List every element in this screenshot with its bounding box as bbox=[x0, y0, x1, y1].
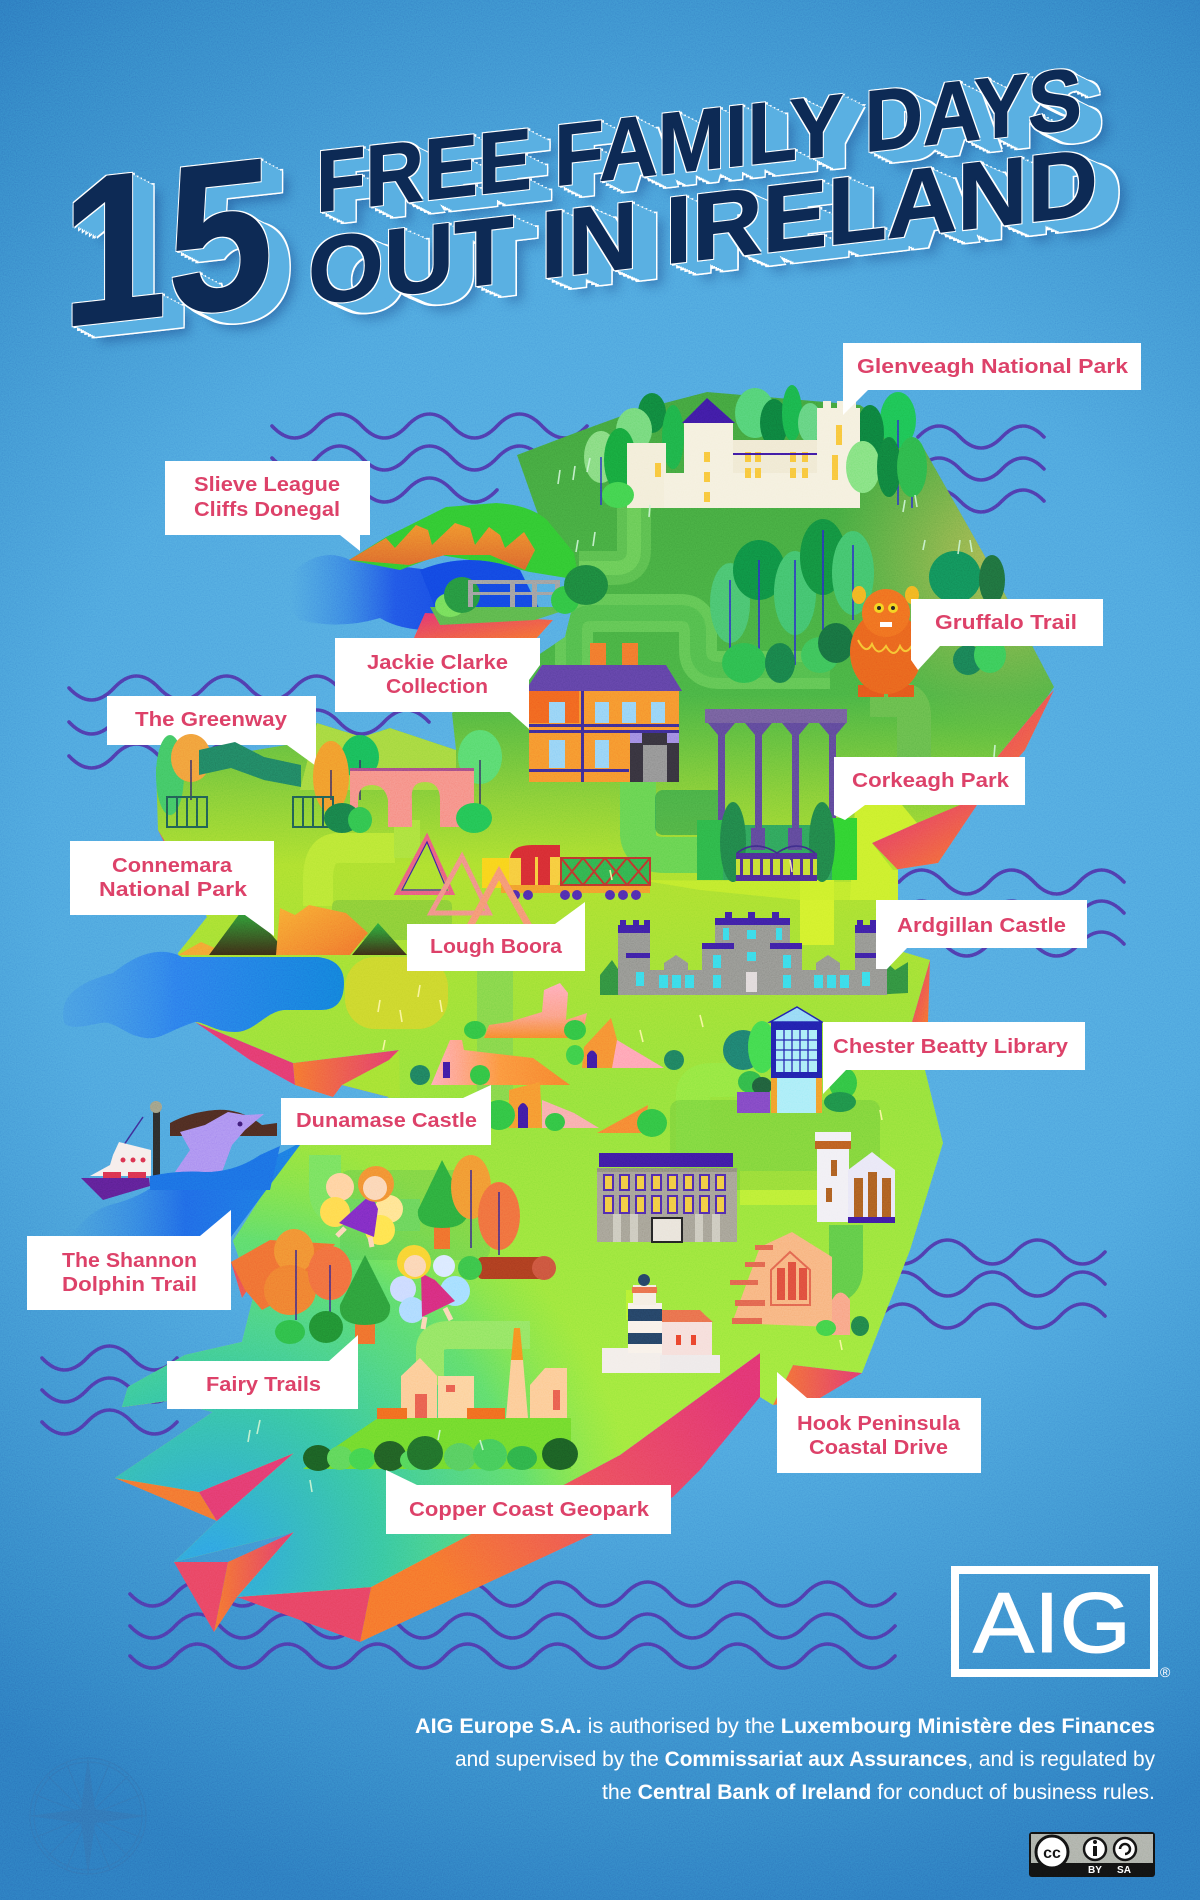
landmark: Shannon dolphin and boat bbox=[81, 1101, 280, 1200]
title number: 15 bbox=[61, 112, 273, 372]
callout: The Shannon Dolphin Trail: Dolphin Trail bbox=[62, 1274, 197, 1296]
callout: The Greenway bbox=[107, 696, 316, 766]
icon: compass rose bbox=[28, 1756, 148, 1876]
landmark: Corkeagh Park columns bbox=[697, 709, 857, 882]
lime headland bbox=[342, 1050, 400, 1097]
callout: Slieve League Cliffs Donegal bbox=[165, 461, 370, 551]
icon: creative commons badge: cc bbox=[1043, 1845, 1061, 1862]
icon: creative commons badge: BY bbox=[1088, 1865, 1102, 1876]
legal text: and supervised by the Commissariat aux Assurances, and is regulated by bbox=[455, 1748, 1155, 1771]
landmark: Connemara hills bbox=[178, 905, 407, 955]
red cliff faces bbox=[115, 690, 1054, 1642]
trail paths bbox=[318, 505, 914, 1385]
landmark: The Greenway bbox=[156, 730, 502, 833]
AIG logo bbox=[955, 1570, 1171, 1680]
callout: Gruffalo Trail bbox=[911, 599, 1103, 670]
callout: Copper Coast Geopark: Copper Coast Geopark bbox=[409, 1499, 650, 1521]
fairy 2 bbox=[390, 1245, 470, 1329]
callout: Jackie Clarke Collection bbox=[335, 638, 540, 729]
callout: Glenveagh National Park bbox=[843, 343, 1141, 415]
land surface bbox=[100, 380, 1080, 1640]
callout: Corkeagh Park: Corkeagh Park bbox=[852, 770, 1010, 792]
callout: Hook Peninsula Coastal Drive: Coastal Drive bbox=[809, 1437, 948, 1459]
callout: Fairy Trails bbox=[167, 1335, 358, 1409]
callout: Connemara National Park: Connemara bbox=[112, 855, 233, 877]
callout: The Shannon Dolphin Trail: The Shannon bbox=[62, 1250, 197, 1272]
callout: Connemara National Park: National Park bbox=[99, 879, 248, 901]
callout: Lough Boora: Lough Boora bbox=[430, 936, 563, 958]
bay bbox=[70, 1141, 303, 1237]
AIG logo: ® bbox=[1160, 1664, 1171, 1680]
Gruffalo bbox=[850, 586, 922, 697]
title line one: FREE FAMILY DAYS bbox=[316, 50, 1082, 231]
fairy 1 bbox=[320, 1166, 403, 1247]
legal text bbox=[415, 1715, 1155, 1804]
callout: Dunamase Castle bbox=[281, 1085, 491, 1145]
callout: Hook Peninsula Coastal Drive: Hook Peninsula bbox=[797, 1413, 961, 1435]
dark meadow blocks bbox=[300, 723, 917, 1260]
landmark: lighthouse bbox=[602, 1274, 720, 1373]
callout: Lough Boora bbox=[407, 902, 585, 971]
landmark: ruined tower and chapel bbox=[815, 1132, 895, 1223]
icon: creative commons badge bbox=[1029, 1832, 1155, 1877]
waves: sea lines bbox=[42, 414, 1124, 1668]
landmark: Georgian house bbox=[597, 1153, 737, 1242]
callout: Jackie Clarke Collection: Collection bbox=[386, 676, 488, 698]
callout: Gruffalo Trail: Gruffalo Trail bbox=[935, 612, 1077, 634]
AIG logo: AIG bbox=[973, 1576, 1131, 1671]
callout: Chester Beatty Library: Chester Beatty Library bbox=[833, 1036, 1069, 1058]
landmark: Copper Coast bbox=[303, 1328, 578, 1471]
grass tufts bbox=[248, 458, 995, 1492]
callout: Chester Beatty Library bbox=[823, 1022, 1085, 1094]
landmark: Ardgillan Castle bbox=[600, 912, 908, 995]
callout: Corkeagh Park bbox=[834, 757, 1025, 820]
fence bbox=[468, 580, 560, 607]
callout: Glenveagh National Park: Glenveagh National Park bbox=[857, 356, 1129, 378]
landmark: Dunamase ruins bbox=[410, 983, 684, 1137]
callout: Copper Coast Geopark bbox=[386, 1470, 671, 1534]
callout: Hook Peninsula Coastal Drive bbox=[777, 1372, 981, 1473]
landmark: Glenveagh castle bbox=[584, 383, 927, 508]
callout: Ardgillan Castle bbox=[876, 900, 1087, 969]
callout: Ardgillan Castle: Ardgillan Castle bbox=[897, 915, 1066, 937]
landmark: Gruffalo trail trees and Gruffalo bbox=[710, 519, 1006, 697]
legal text: AIG Europe S.A. is authorised by the Luxembourg Ministère des Finances bbox=[415, 1715, 1155, 1738]
landmark: Lough Boora sculptures and train bbox=[397, 837, 650, 930]
callout: Connemara National Park bbox=[70, 841, 274, 936]
callout: Slieve League Cliffs Donegal: Slieve League bbox=[194, 474, 340, 496]
inlet bbox=[287, 555, 500, 630]
callout: Dunamase Castle: Dunamase Castle bbox=[296, 1110, 477, 1132]
landmark: Hook abbey bbox=[730, 1232, 869, 1336]
map of Ireland bbox=[63, 380, 1080, 1642]
callout: Fairy Trails: Fairy Trails bbox=[206, 1374, 321, 1396]
landmark: Chester Beatty Library bbox=[723, 1007, 857, 1113]
callout: Slieve League Cliffs Donegal: Cliffs Donegal bbox=[194, 499, 340, 521]
landmark: Jackie Clarke house bbox=[525, 643, 682, 782]
title line two: OUT IN IRELAND bbox=[308, 129, 1098, 326]
lake bbox=[63, 952, 344, 1038]
callout: Jackie Clarke Collection: Jackie Clarke bbox=[367, 652, 508, 674]
landmark: Fairy Trails bbox=[231, 1155, 556, 1344]
callout: The Greenway: The Greenway bbox=[135, 709, 288, 731]
callout: The Shannon Dolphin Trail bbox=[27, 1210, 231, 1310]
icon: creative commons badge: SA bbox=[1117, 1865, 1131, 1876]
landmark: Slieve League cliffs bbox=[349, 503, 608, 640]
legal text: the Central Bank of Ireland for conduct of business rules. bbox=[602, 1781, 1155, 1804]
